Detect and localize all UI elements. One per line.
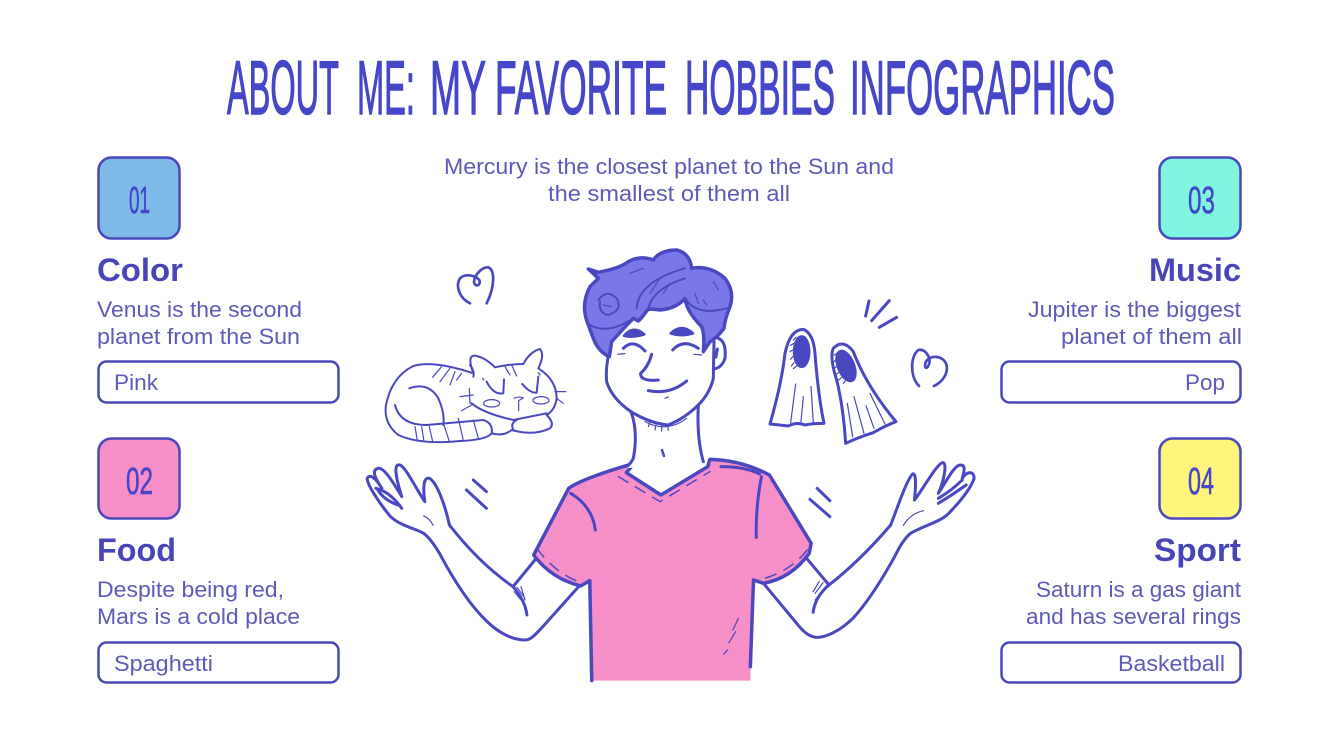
answer: spaghetti: Spaghetti (114, 651, 213, 676)
heading: food: Food (97, 532, 176, 568)
number badge 02: 02 (126, 461, 153, 503)
title: FAVORITE (495, 46, 667, 131)
description: music: Jupiter is the biggest (1028, 297, 1241, 322)
icon: left heart (458, 267, 493, 303)
intro text (444, 154, 894, 206)
t-shirt (534, 459, 811, 681)
intro text: the smallest of them all (548, 181, 790, 206)
number badge 03: 03 (1188, 180, 1215, 222)
number badge 02 (98, 438, 180, 518)
answer: pink: Pink (114, 370, 159, 395)
eyebrows (624, 328, 693, 336)
answer: pop: Pop (1185, 370, 1225, 395)
title: ME: (357, 46, 415, 131)
title (227, 46, 1115, 131)
illustration: swim fins (770, 301, 897, 443)
heading: color: Color (97, 252, 183, 288)
panel: sport (1002, 438, 1241, 682)
intro text: Mercury is the closest planet to the Sun and (444, 154, 894, 179)
heading: music: Music (1149, 252, 1241, 288)
heading: sport: Sport (1154, 532, 1241, 568)
title: ABOUT (227, 46, 339, 131)
nose and mouth (641, 354, 687, 392)
description: food (97, 577, 300, 629)
description: food: Mars is a cold place (97, 604, 300, 629)
answer: pink (98, 362, 338, 402)
arms (367, 463, 974, 640)
description: sport (1026, 577, 1241, 629)
neck and face (607, 338, 713, 468)
description: music (1028, 297, 1242, 349)
neck crease (662, 450, 664, 456)
illustration: sleeping cat (386, 349, 566, 442)
number badge 03 (1160, 158, 1240, 238)
description: sport: Saturn is a gas giant (1036, 577, 1241, 602)
icon: right heart (912, 350, 947, 386)
number badge 01: 01 (129, 180, 150, 222)
hair (585, 250, 732, 357)
description: color (97, 297, 302, 349)
illustration: person (367, 250, 974, 681)
right fin (832, 344, 896, 443)
number badge 01 (98, 158, 180, 238)
head (585, 250, 732, 468)
description: music: planet of them all (1061, 324, 1242, 349)
eyes (623, 344, 698, 351)
number badge 04 (1160, 438, 1240, 518)
answer: basketball: Basketball (1118, 651, 1225, 676)
description: color: planet from the Sun (97, 324, 300, 349)
panel: music (1002, 158, 1242, 402)
description: sport: and has several rings (1026, 604, 1241, 629)
panel: color (97, 158, 338, 402)
description: color: Venus is the second (97, 297, 302, 322)
answer: spaghetti (98, 642, 338, 682)
answer: pop (1002, 362, 1240, 402)
ear (713, 338, 725, 369)
motion ticks (866, 301, 897, 327)
title: MY (430, 46, 486, 131)
answer: basketball (1002, 642, 1240, 682)
title: HOBBIES (685, 46, 835, 131)
left fin (770, 329, 824, 426)
description: food: Despite being red, (97, 577, 284, 602)
number badge 04: 04 (1188, 461, 1214, 503)
panel: food (97, 438, 338, 682)
